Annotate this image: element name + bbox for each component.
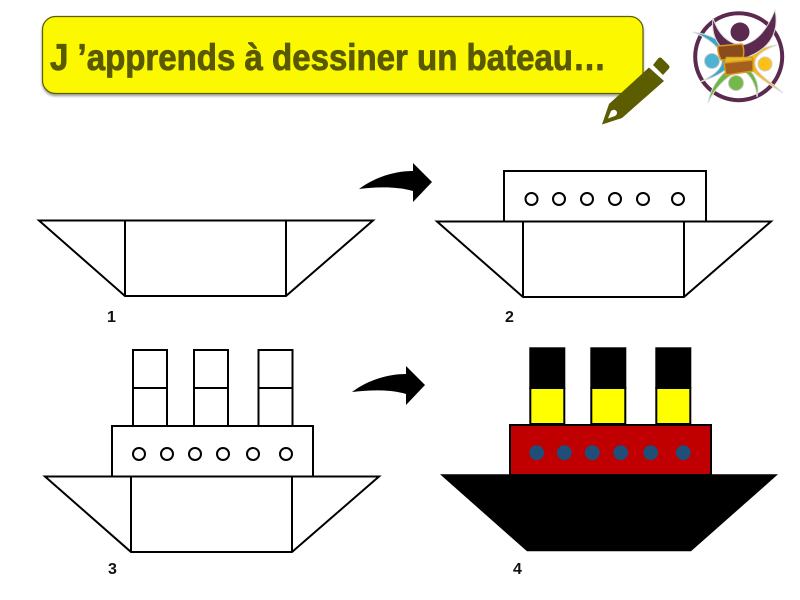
boat step 3 bbox=[45, 350, 379, 552]
cabin bbox=[112, 426, 313, 476]
icon: logo bbox=[693, 10, 783, 103]
cabin bbox=[504, 171, 706, 222]
arrow: step 1 to 2 bbox=[359, 163, 432, 202]
label 1: 1 bbox=[107, 309, 116, 326]
chimneys bbox=[133, 350, 292, 426]
cabin bbox=[510, 425, 711, 475]
chimneys bbox=[530, 348, 690, 424]
boat step 4 coloured bbox=[440, 348, 778, 551]
title banner bbox=[42, 16, 643, 94]
title: J ’apprends à dessiner un bateau… bbox=[50, 37, 606, 78]
label 4: 4 bbox=[513, 561, 522, 578]
label 3: 3 bbox=[108, 561, 117, 578]
hull bbox=[45, 476, 379, 552]
boat step 2 bbox=[437, 171, 771, 297]
arrow: step 3 to 4 bbox=[352, 366, 425, 405]
hull bbox=[440, 474, 778, 551]
label 2: 2 bbox=[505, 309, 514, 326]
hull bbox=[437, 222, 771, 297]
icon: treasure chest bbox=[718, 44, 753, 75]
boat step 1 bbox=[39, 220, 373, 296]
icon: pencil bbox=[602, 58, 670, 124]
